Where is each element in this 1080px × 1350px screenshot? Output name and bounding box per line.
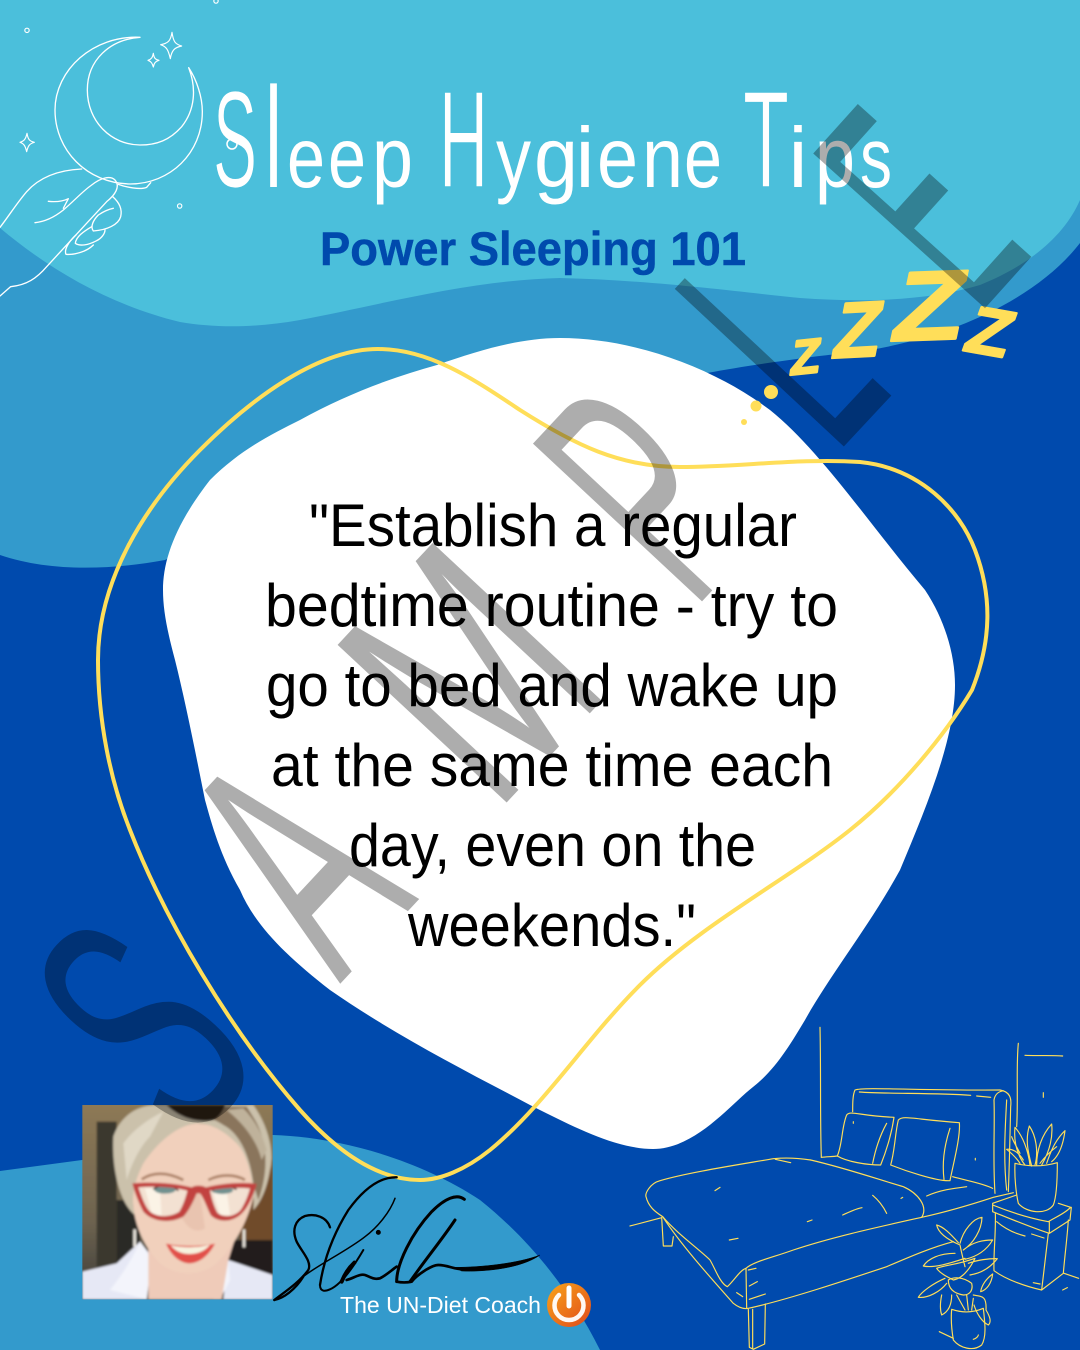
- illustration: bed with plants: [630, 1027, 1079, 1349]
- quote text: at the same time each: [271, 732, 833, 799]
- title: l: [265, 59, 282, 218]
- title: i: [788, 111, 808, 206]
- title: e: [684, 111, 722, 206]
- title: p: [372, 111, 413, 206]
- shirt: [82, 1242, 273, 1299]
- watermark: SAMPLE: L: [612, 184, 947, 505]
- quote text: weekends.": [407, 892, 696, 959]
- quote text: [265, 492, 838, 959]
- brand name: The UN-Diet Coach: [340, 1292, 541, 1318]
- title: s: [860, 111, 892, 206]
- title: T: [743, 63, 789, 217]
- title: p: [815, 111, 855, 206]
- title: S: [213, 63, 257, 217]
- quote text: bedtime routine - try to: [265, 572, 838, 639]
- yellow outline blob: [98, 349, 987, 1180]
- watermark: SAMPLE: A: [118, 691, 472, 1033]
- title: [213, 59, 892, 218]
- headboard: [853, 1089, 1011, 1193]
- icon: sleeping zzz: [741, 250, 1025, 425]
- icon: sleeping zzz: Z: [787, 329, 824, 386]
- face: [132, 1122, 255, 1250]
- title: g: [534, 111, 578, 206]
- title: y: [496, 111, 531, 206]
- earrings: [133, 1229, 136, 1247]
- light blue wave top: [0, 0, 1080, 326]
- mattress: [811, 1156, 993, 1217]
- lips: [166, 1244, 215, 1263]
- watermark: SAMPLE: E: [752, 49, 1080, 364]
- icon: sleeping zzz: Z: [883, 250, 977, 363]
- walls: [630, 1027, 1079, 1290]
- white blob: [163, 338, 955, 1149]
- icon: power button: [547, 1283, 591, 1327]
- bed legs: [662, 1217, 765, 1349]
- mid blue wave bottom: [0, 1135, 600, 1350]
- hair: [113, 1105, 271, 1215]
- lenses: [138, 1186, 250, 1217]
- side table: [993, 1195, 1071, 1290]
- subtitle: Power Sleeping 101: [320, 222, 746, 275]
- watermark: SAMPLE: P: [470, 325, 819, 660]
- title: n: [642, 111, 683, 206]
- quote text: go to bed and wake up: [266, 652, 838, 719]
- title: i: [576, 111, 594, 206]
- quote text: day, even on the: [349, 812, 756, 879]
- icon: sleeping zzz: Z: [827, 284, 891, 375]
- icon: hand holding crescent moon: [0, 0, 218, 296]
- neck: [146, 1242, 236, 1300]
- floor plant: [939, 1308, 985, 1349]
- glasses frame: [132, 1183, 257, 1221]
- icon: sleeping zzz: Z: [956, 292, 1025, 371]
- title: e: [597, 111, 638, 206]
- mid blue wave top: [0, 0, 1080, 568]
- photo: portrait: [80, 1100, 280, 1303]
- signature: [274, 1177, 540, 1300]
- title: e: [328, 111, 366, 206]
- eyes: [154, 1186, 176, 1194]
- watermark: SAMPLE: M: [273, 482, 666, 864]
- eyebrows: [142, 1174, 245, 1180]
- pillows: [837, 1113, 894, 1165]
- potted plant on table: [1015, 1163, 1057, 1212]
- title: H: [439, 63, 488, 217]
- title: e: [287, 111, 325, 206]
- quote text: "Establish a regular: [309, 492, 797, 559]
